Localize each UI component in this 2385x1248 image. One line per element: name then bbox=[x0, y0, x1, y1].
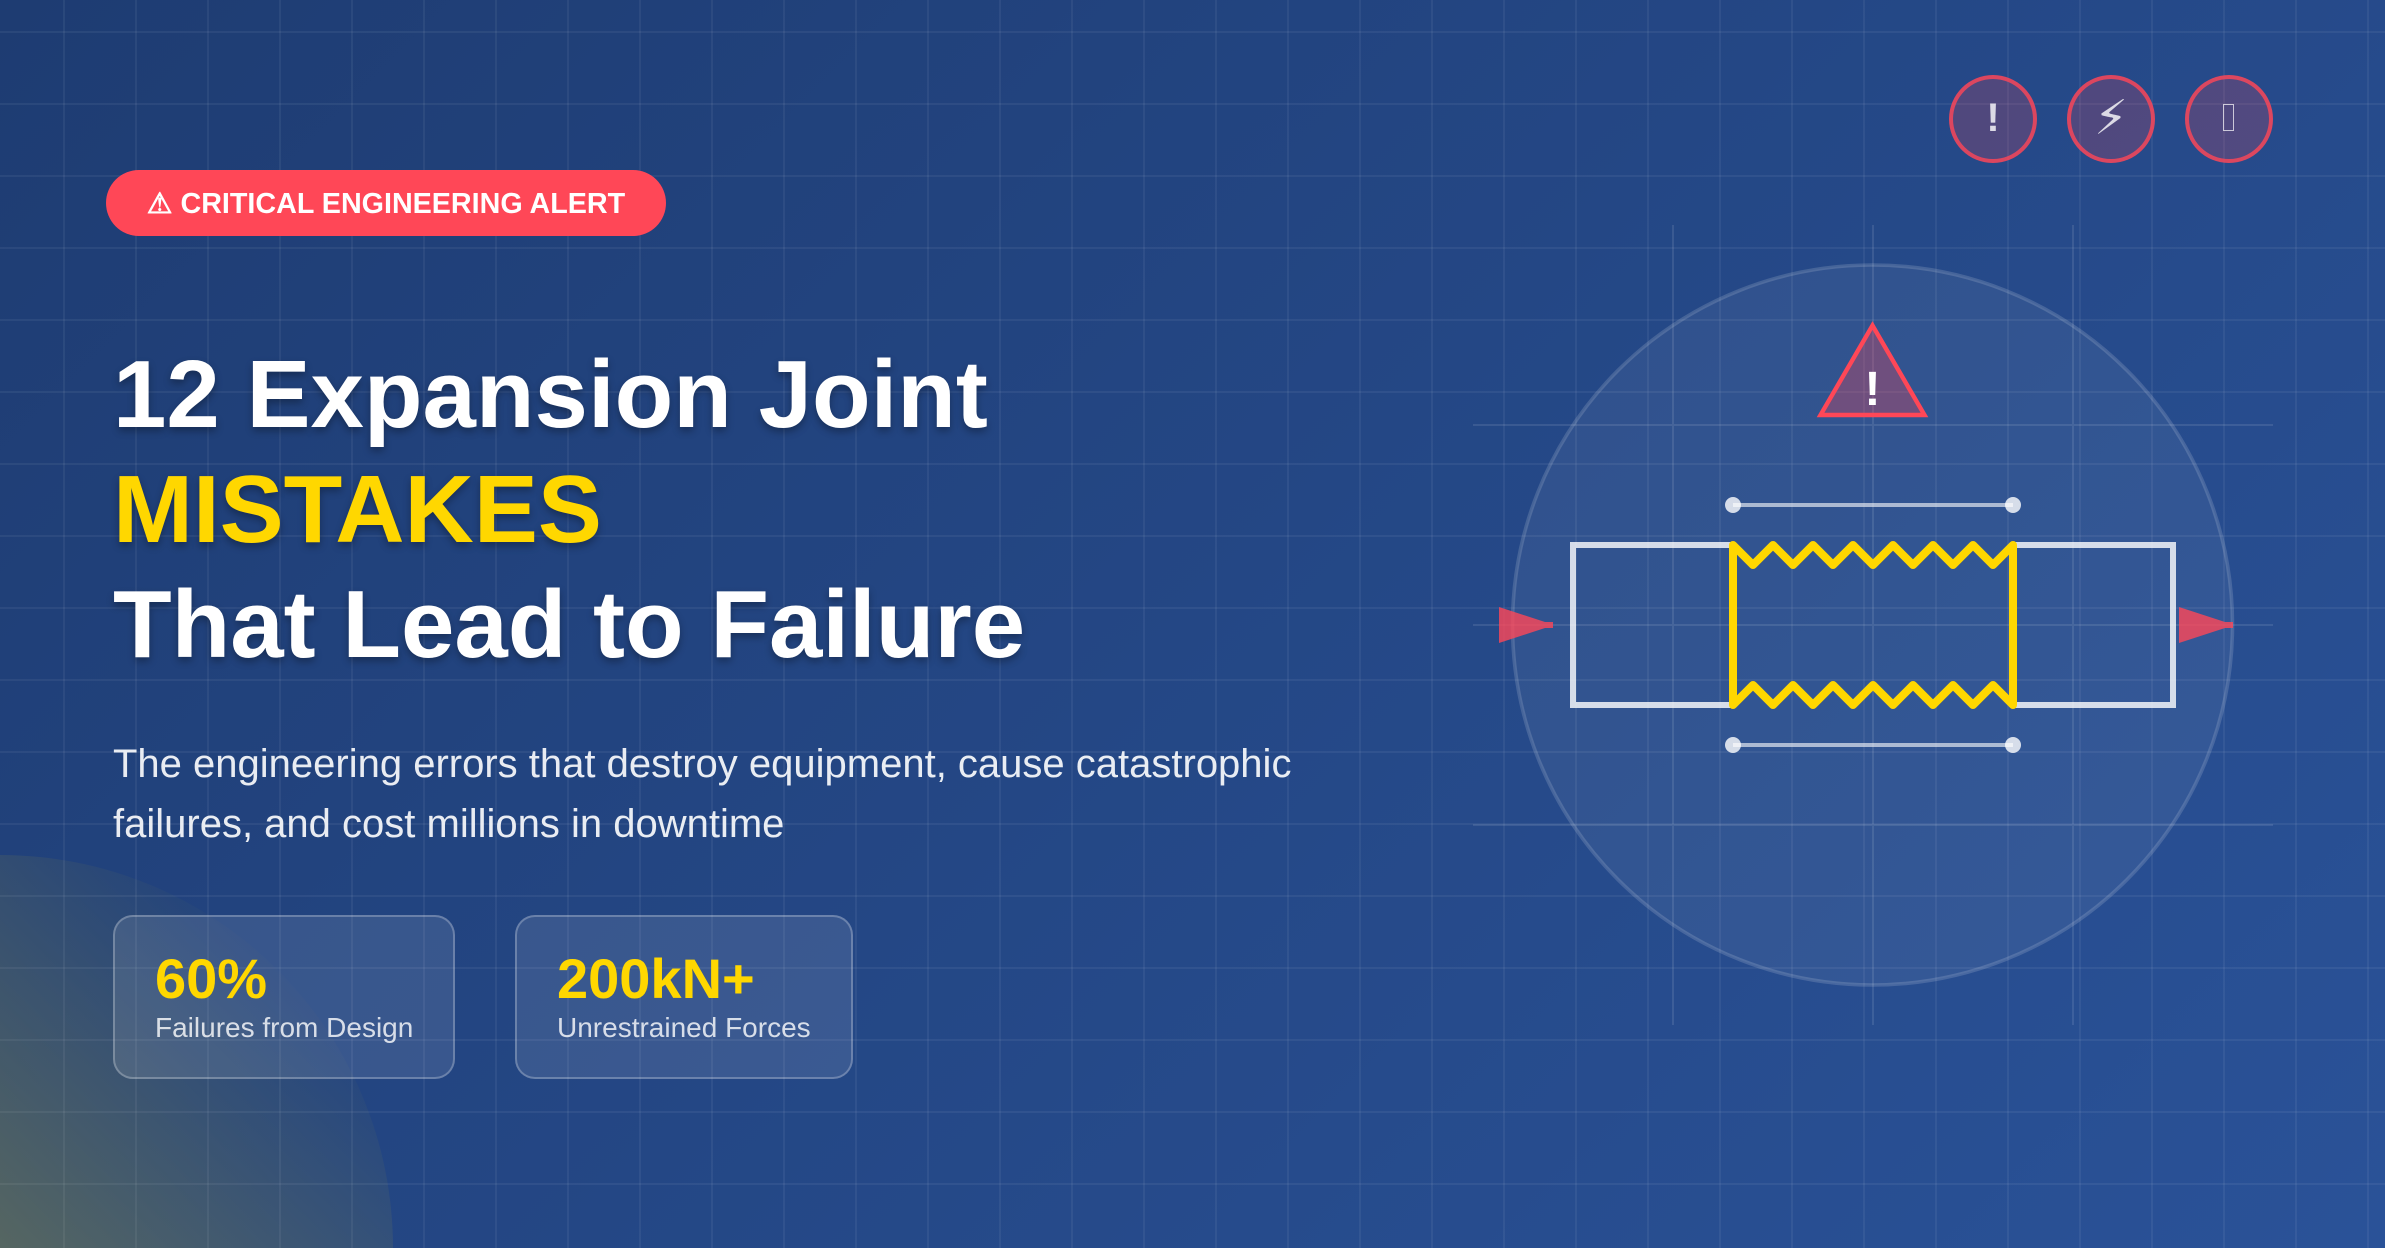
bottom dimension line bbox=[1725, 737, 2021, 753]
title bbox=[112, 341, 1025, 678]
stat card: 60% bbox=[113, 915, 455, 1079]
decorative glow: bottom-left circle bbox=[0, 855, 393, 1248]
blueprint circle bbox=[1512, 265, 2232, 985]
stat value: 200kN+ bbox=[557, 947, 755, 1010]
title line 1: 12 Expansion Joint bbox=[113, 341, 988, 448]
title line 3: That Lead to Failure bbox=[113, 571, 1025, 678]
badge: critical engineering alert: ⚠ CRITICAL ENGINEERING ALERT bbox=[147, 188, 625, 220]
stat value: 60% bbox=[155, 947, 267, 1010]
stat label: Failures from Design bbox=[155, 1012, 413, 1043]
top dimension line bbox=[1725, 497, 2021, 513]
warning triangle: ! bbox=[1865, 363, 1880, 416]
left pipe section bbox=[1573, 545, 1733, 705]
arrow: right force bbox=[2179, 607, 2233, 643]
arrow: left force bbox=[1499, 607, 1553, 643]
icon: missing glyph box bbox=[2185, 75, 2273, 163]
bellows bbox=[1733, 545, 2013, 705]
warning triangle bbox=[1820, 326, 1924, 416]
stat label: Unrestrained Forces bbox=[557, 1012, 811, 1043]
title line 2: highlighted word: MISTAKES bbox=[113, 456, 602, 563]
icon: exclamation: ! bbox=[1986, 96, 2000, 140]
badge: critical engineering alert bbox=[106, 170, 666, 236]
icon: lightning bbox=[2067, 75, 2155, 163]
stat card: 200kN+ bbox=[515, 915, 853, 1079]
icon: exclamation bbox=[1949, 75, 2037, 163]
subtitle: The engineering errors that destroy equipment, cause catastrophic bbox=[113, 742, 1291, 786]
right pipe section bbox=[2013, 545, 2173, 705]
icon: lightning: ⚡︎ bbox=[2094, 90, 2128, 146]
subtitle: failures, and cost millions in downtime bbox=[113, 802, 784, 846]
subtitle bbox=[113, 742, 1291, 846]
